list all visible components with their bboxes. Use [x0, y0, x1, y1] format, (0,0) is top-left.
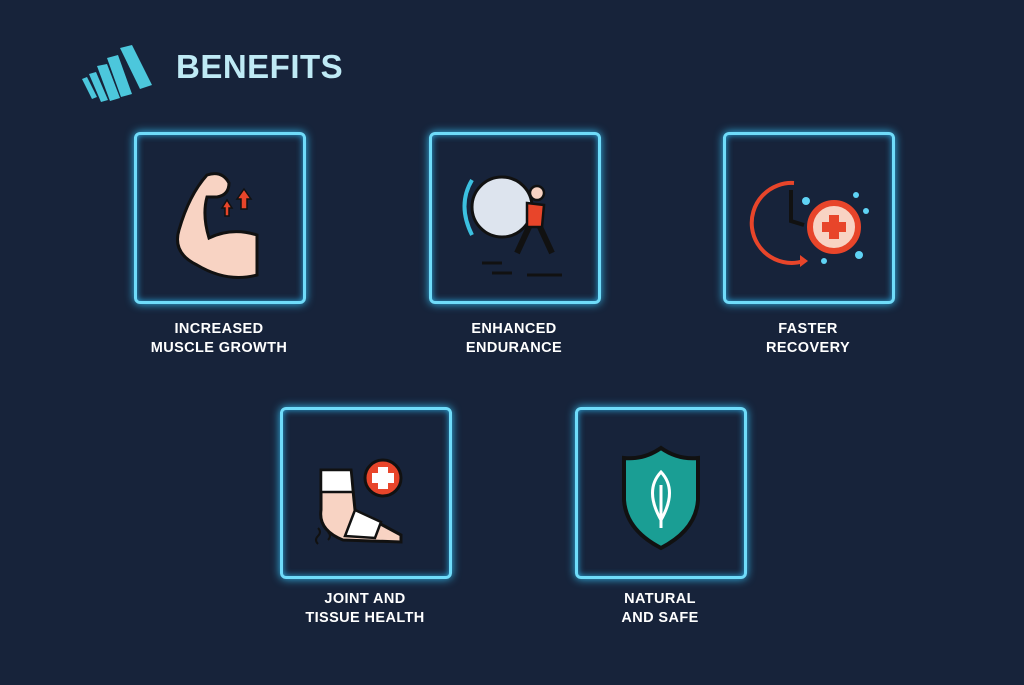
label: muscle growth: [151, 321, 287, 356]
label: recovery: [766, 321, 850, 356]
logo: [82, 45, 152, 102]
label: joint health: [305, 591, 425, 626]
label: natural: NATURAL: [624, 591, 696, 607]
label: recovery: FASTER: [778, 321, 838, 337]
label: endurance: ENDURANCE: [466, 340, 562, 356]
panel: muscle growth: [134, 132, 306, 304]
label: recovery: RECOVERY: [766, 340, 850, 356]
panel: endurance: [429, 132, 601, 304]
title: BENEFITS: [176, 48, 343, 85]
label: natural: AND SAFE: [621, 610, 699, 626]
label: natural: [621, 591, 699, 626]
panel: natural: [575, 407, 747, 579]
label: joint health: TISSUE HEALTH: [305, 610, 425, 626]
label: muscle growth: MUSCLE GROWTH: [151, 340, 287, 356]
panel: recovery: [723, 132, 895, 304]
label: muscle growth: INCREASED: [174, 321, 264, 337]
label: endurance: [466, 321, 562, 356]
panel: joint health: [280, 407, 452, 579]
label: endurance: ENHANCED: [471, 321, 557, 337]
label: joint health: JOINT AND: [324, 591, 406, 607]
